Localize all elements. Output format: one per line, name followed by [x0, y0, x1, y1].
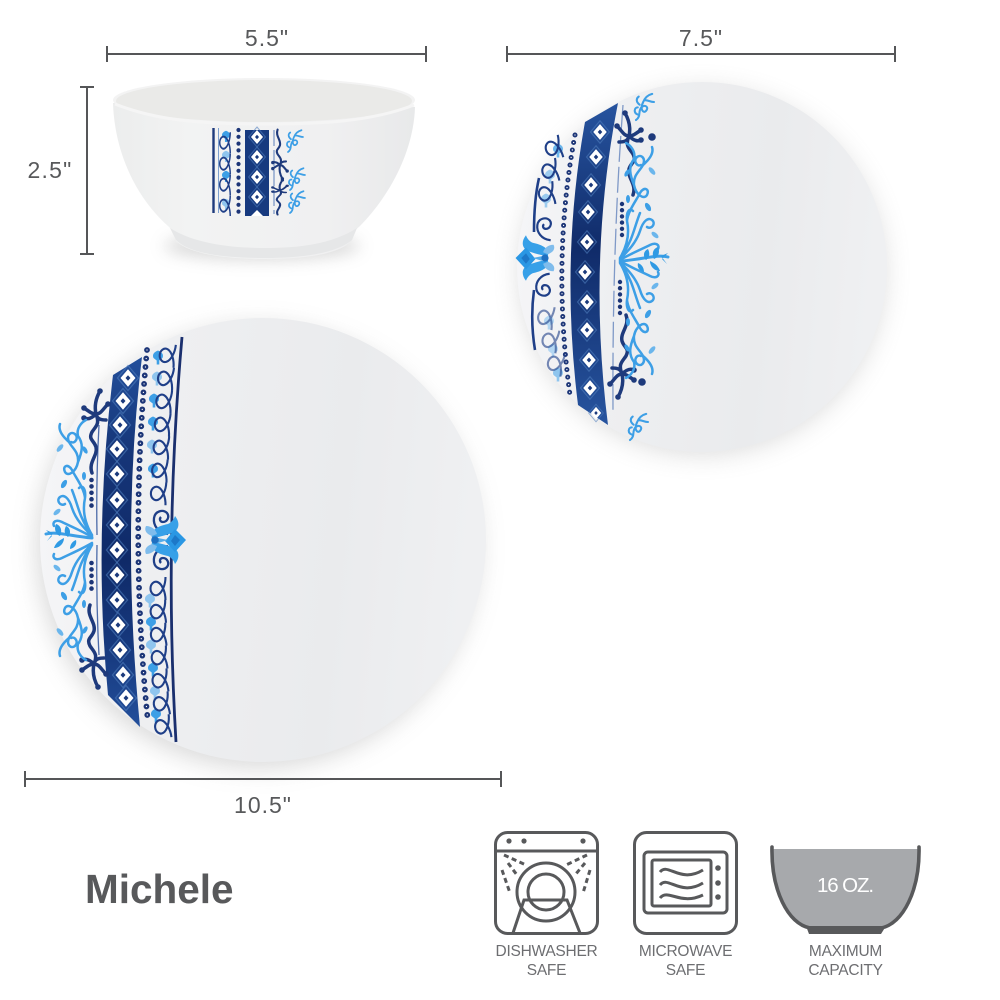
dimension: bowl height 2.5 inches: 2.5": [28, 157, 72, 183]
dinner plate navy edge line: [171, 337, 182, 742]
capacity value: 16 OZ.: [817, 874, 873, 897]
dinner plate: [38, 318, 486, 767]
dinner plate shadow: [38, 327, 478, 767]
dimension: bowl width 5.5 inches: [107, 25, 426, 62]
dimension: salad plate width 7.5 inches: [507, 25, 895, 62]
dinner plate surface: [40, 318, 486, 762]
dinner plate tulips: [145, 350, 163, 722]
salad plate dot chain: [562, 135, 575, 395]
pattern name: Michele: [85, 866, 234, 912]
salad plate inner navy ornaments: [607, 105, 656, 412]
salad plate shadow: [520, 90, 884, 454]
dimension: dinner plate width 10.5 inches: 10.5": [234, 792, 292, 818]
dimension: dinner plate width 10.5 inches: [25, 771, 501, 818]
dinner plate outer ornaments: [46, 388, 111, 690]
salad plate surface: [517, 82, 887, 452]
microwave label: SAFE: [666, 962, 705, 979]
dimension: salad plate width 7.5 inches: 7.5": [679, 25, 723, 51]
dinner plate flower: [145, 516, 186, 564]
salad plate foliage: [620, 94, 668, 440]
capacity label: MAXIMUM: [809, 943, 882, 960]
salad plate: [516, 82, 887, 454]
icon: dishwasher safe: [495, 832, 598, 979]
capacity label: CAPACITY: [808, 962, 883, 979]
icon: maximum capacity bowl: [772, 847, 919, 979]
dinner plate dark band: [102, 357, 142, 727]
salad plate dark band: [570, 103, 618, 425]
icon: microwave safe: [634, 832, 736, 979]
bowl decorative band: [214, 127, 305, 216]
dishwasher label: DISHWASHER: [496, 943, 598, 960]
bowl body: [113, 78, 415, 259]
salad plate flower: [516, 235, 554, 281]
microwave label: MICROWAVE: [639, 943, 732, 960]
dinner plate dot chain: [138, 350, 148, 722]
dinner plate scroll chain: [150, 343, 176, 739]
bowl shadow: [164, 232, 360, 260]
dishwasher label: SAFE: [527, 962, 566, 979]
bowl with dimensions: [113, 78, 415, 260]
dimension: bowl height 2.5 inches: [28, 87, 94, 254]
dimension: bowl width 5.5 inches: 5.5": [245, 25, 289, 51]
salad plate scroll border: [532, 135, 565, 382]
